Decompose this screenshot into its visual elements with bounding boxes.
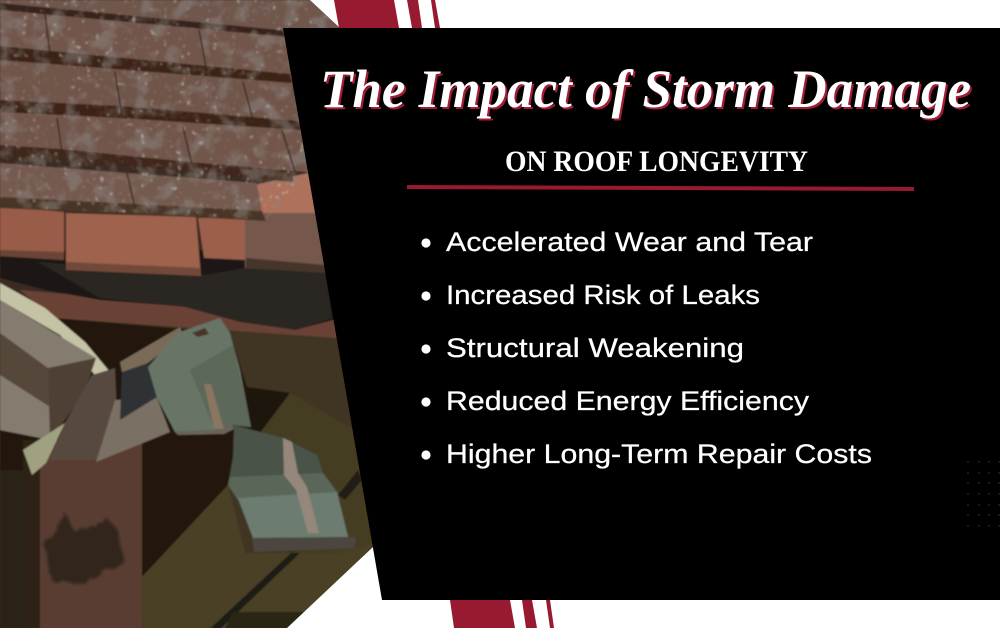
tan scar upper (204, 384, 224, 429)
tan torn strip (120, 327, 183, 372)
left downspout section (0, 300, 96, 440)
brown crumpled section (50, 368, 117, 460)
wall and soffit (0, 318, 373, 628)
brown fascia board (20, 290, 337, 338)
dark void under the tiles (0, 250, 340, 330)
rusty post (23, 440, 142, 628)
photo: damaged roof and gutter (0, 0, 400, 628)
black crumple (120, 362, 157, 420)
damaged green gutter (0, 283, 356, 552)
green lower piece (226, 425, 323, 511)
bullet 1: Accelerated Wear and Tear (446, 227, 813, 257)
torn underlayment (38, 262, 332, 330)
bullet list (421, 227, 872, 469)
top red stripes (334, 0, 440, 28)
bare salmon tiles (0, 172, 325, 276)
roof tile courses (0, 0, 340, 222)
gutter end cap (252, 537, 356, 552)
tan scar lower (283, 438, 319, 533)
grey lower section (96, 398, 170, 462)
red divider (407, 185, 914, 191)
bottom red stripes (450, 600, 554, 628)
title: The Impact of Storm Damage (320, 59, 971, 119)
green upper piece (148, 318, 251, 432)
bullet 4: Reduced Energy Efficiency (446, 386, 810, 416)
bullet 3: Structural Weakening (446, 333, 744, 363)
cream gutter edge (0, 283, 110, 375)
dot pattern (967, 461, 1000, 527)
photo base colour (0, 0, 340, 628)
torn hole (192, 328, 209, 337)
black content panel (283, 28, 1000, 600)
cream tip (23, 423, 65, 475)
bullet 2: Increased Risk of Leaks (446, 280, 760, 310)
bullet 5: Higher Long-Term Repair Costs (446, 439, 872, 469)
subtitle: ON ROOF LONGEVITY (505, 145, 808, 178)
